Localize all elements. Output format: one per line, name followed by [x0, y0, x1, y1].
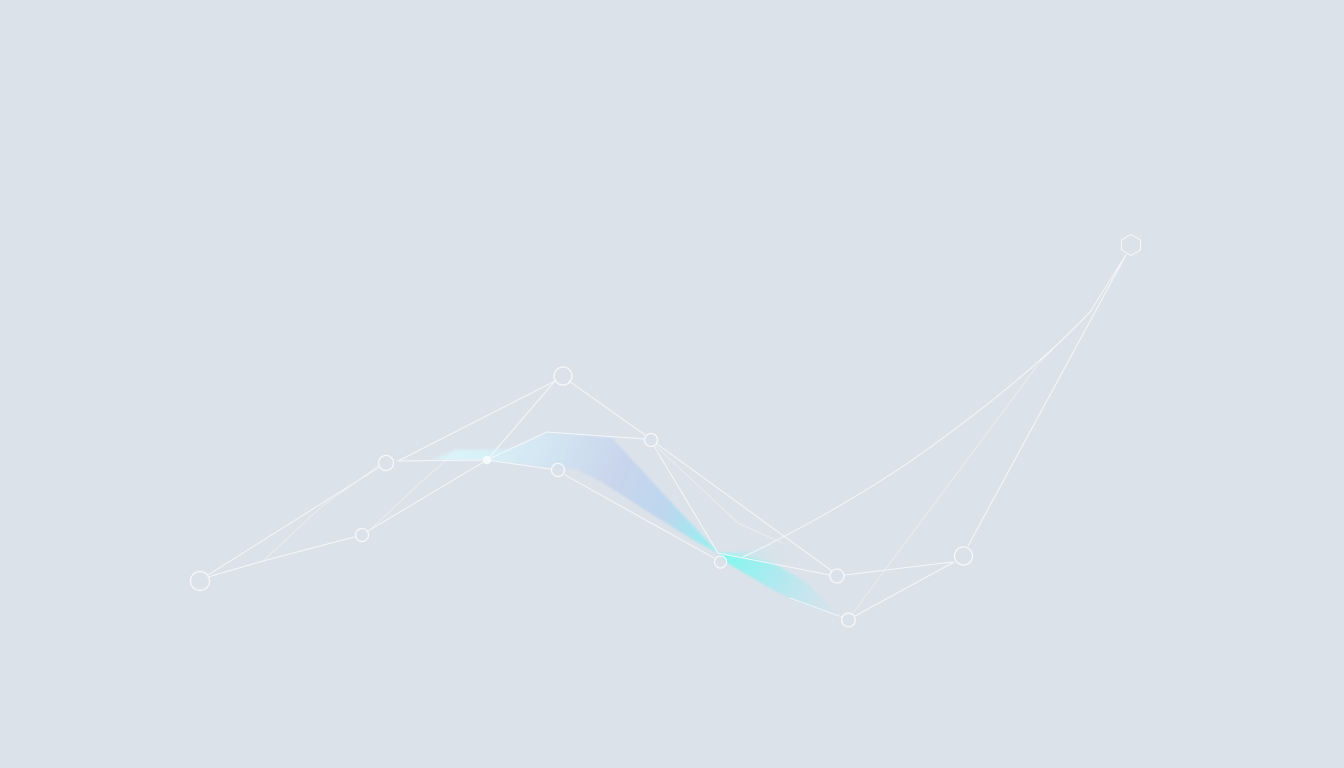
ribbon: main band [430, 432, 718, 553]
lines: left cluster [208, 381, 555, 577]
node 9 [830, 569, 844, 583]
node 11 [954, 547, 972, 565]
node 1 [190, 572, 210, 590]
node 8 [714, 556, 726, 568]
lines: thin right strands [656, 310, 1092, 613]
lines: ribbon top and centre edges [487, 381, 714, 558]
node 4: filled [483, 456, 491, 464]
lines: centre to right nodes [654, 255, 1126, 617]
node 6 [552, 464, 564, 476]
ribbon: faint upper fan [718, 542, 800, 568]
ribbon: translucent gradient bands [430, 432, 842, 617]
lines: left cluster thin [263, 455, 452, 561]
node 5 [554, 367, 572, 385]
nodes [190, 234, 1140, 627]
node 2 [378, 456, 394, 470]
node 12: hexagon [1122, 234, 1140, 256]
connecting lines [208, 255, 1126, 617]
ribbon: lower cyan band [718, 552, 842, 617]
node 10 [842, 613, 855, 627]
node 3 [356, 528, 368, 542]
node 7 [644, 434, 658, 446]
